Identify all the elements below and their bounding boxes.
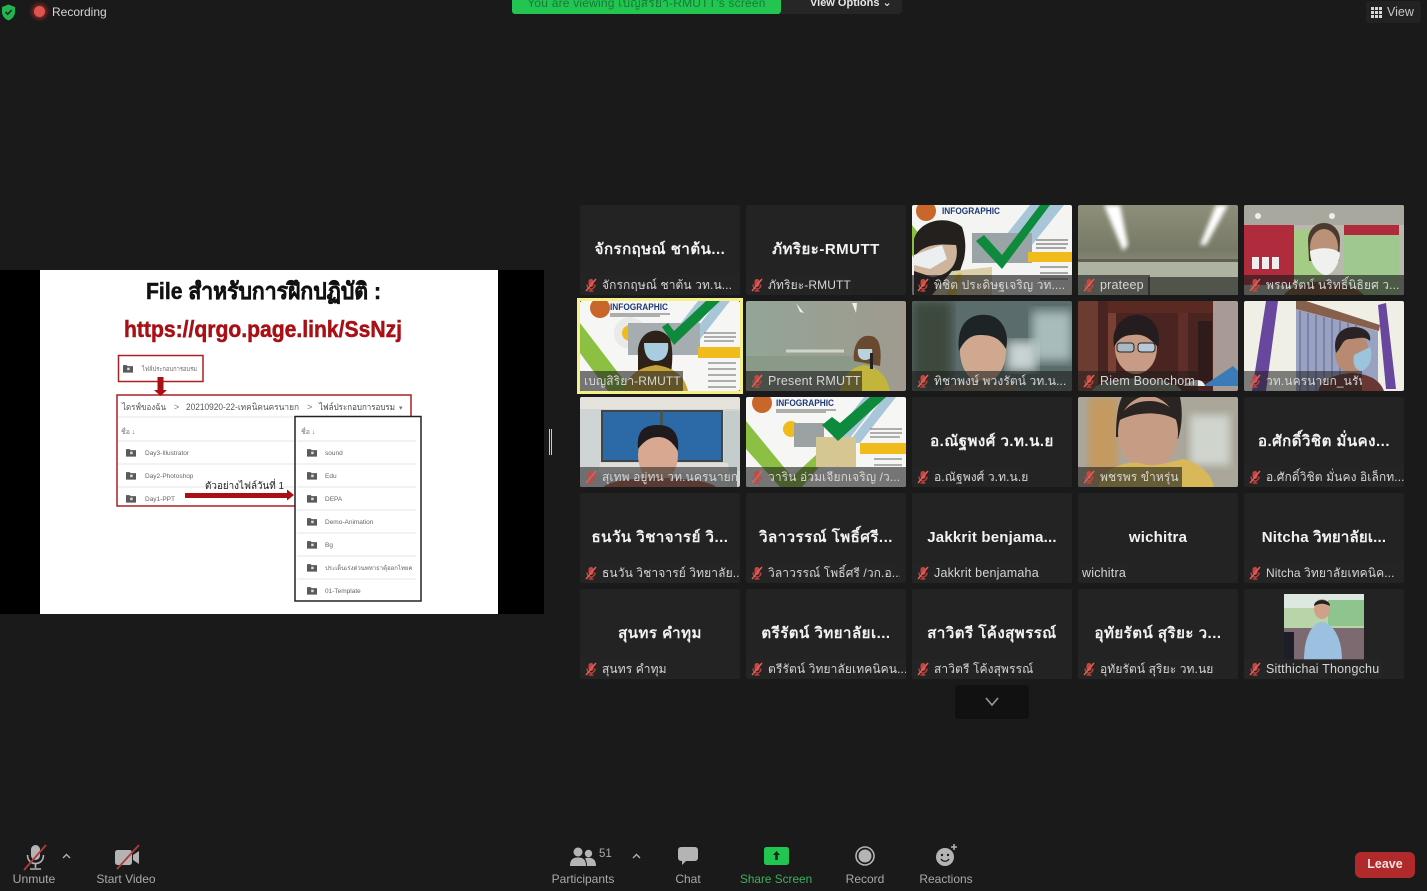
display name: สาวิตรี โค้งสุพรรณ์ [927,625,1057,642]
display name: wichitra [1129,529,1187,546]
day 1 folder list: 01-Template [325,588,361,595]
toolbar: reactions: Reactions [919,872,973,886]
name label [912,371,1072,391]
name label: จักรกฤษณ์ ชาต้น วท.น... [602,278,732,292]
panel: shared slide [0,270,544,614]
name label [746,659,906,679]
name label: พรณรัตน์ นริทธิ์นิธิยศ ว... [1266,278,1399,292]
name label [580,563,740,583]
banner: viewing screen [512,0,781,14]
display name: จักรกฤษณ์ ชาต้น... [595,241,725,258]
tile: participant 13 [912,397,1072,487]
tile: participant 5 video [1244,205,1404,295]
tile: active speaker video [580,301,740,391]
name label [580,371,683,391]
tile: participant 24 [1078,589,1238,679]
tile: participant 10 video [1244,301,1404,391]
display name: วิลาวรรณ์ โพธิ์ศรี... [759,529,893,546]
toolbar: start video: Start Video [96,872,156,886]
video: poster with woman in mask [580,301,740,391]
name label: เบญสิริยา-RMUTT [584,374,681,388]
name label [1078,467,1182,487]
tile: participant 23 [912,589,1072,679]
name label: ทิชาพงษ์ พวงรัตน์ วท.น... [934,374,1066,388]
breadcrumb and file list box: ไดรฟ์ของฉัน [121,401,166,412]
day 1 folder list [295,416,421,601]
tile: participant 2 [746,205,906,295]
video: man by blue window [580,397,740,487]
day 1 folder list: Demo-Animation [325,519,374,526]
tile: participant 19 [1078,493,1238,583]
name label: Nitcha วิทยาลัยเทคนิค... [1266,566,1395,580]
video: woman with microphone [746,301,906,391]
tile: participant 1 [580,205,740,295]
video: poster with man in mask [912,205,1072,295]
toolbar: start video [96,844,156,886]
video: man with curtains [1244,301,1404,391]
breadcrumb and file list box: > [307,402,312,412]
toolbar: unmute [13,844,55,886]
button: leave [1355,852,1415,878]
name label [580,659,667,679]
breadcrumb and file list box: ไฟล์ประกอบการอบรม [318,401,395,412]
panel splitter [549,429,552,455]
tile: participant 16 [580,493,740,583]
name label: พชรพร ขำหรุ่น [1100,470,1179,484]
name label: พิชิต ประดิษฐเจริญ วท.... [934,278,1065,292]
toolbar: record: Record [846,872,884,886]
breadcrumb and file list box: Day3-Illustrator [145,450,190,457]
video: woman with white mask [1244,205,1404,295]
name label: สุนทร คำทุม [602,662,667,676]
arrow: right [185,490,294,500]
tile: Riem Boonchom video [1078,301,1238,391]
video: ceiling with lights [1078,205,1238,295]
tile: participant 12 video [746,397,906,487]
day 1 folder list: ชื่อ ↓ [301,427,315,436]
tile: participant 3 video [912,205,1072,295]
day 1 folder list: Bg [325,542,333,549]
toolbar: participants: 51 [599,848,612,860]
tile: participant 22 [746,589,906,679]
name label [746,467,906,487]
tile: participant 17 [746,493,906,583]
recording indicator: Recording [52,5,107,19]
name label: ภัทริยะ-RMUTT [768,278,851,292]
name label: สุเทพ อยู่ทน วท.นครนายก [602,470,737,484]
arrow: down [154,377,167,396]
name label [912,275,1072,295]
toolbar: chat [675,847,701,886]
toolbar: participants: Participants [552,872,614,886]
name label: Sitthichai Thongchu [1266,662,1379,676]
folder highlight box: ไฟล์ประกอบการอบรม [141,365,197,373]
toolbar: chat: Chat [675,872,701,886]
day 1 folder list: DEPA [325,496,343,503]
display name: Nitcha วิทยาลัยเ... [1262,529,1386,546]
toolbar: unmute: Unmute [13,872,55,886]
display name: ภัทริยะ-RMUTT [772,241,880,258]
name label [1078,371,1198,391]
name label [912,659,1033,679]
recording indicator [30,2,107,22]
video: poster backdrop [746,397,906,487]
toolbar: participants [552,848,614,886]
day 1 folder list: sound [325,450,343,457]
name label [746,563,900,583]
display name: ธนวัน วิชาจารย์ วิ... [592,529,728,546]
name label [912,467,1028,487]
video: poster with man in mask: INFOGRAPHIC [942,206,1000,216]
display name: Jakkrit benjama... [927,529,1057,546]
display name: สุนทร คำทุม [618,625,702,642]
icon: security shield [2,4,15,20]
video: woman close-up [1078,397,1238,487]
name label: วาริน อ่วมเจียกเจริญ /ว... [768,470,900,484]
name label: Riem Boonchom [1100,374,1195,388]
breadcrumb and file list box: Day2-Photoshop [145,473,194,480]
button: view layout: View [1387,5,1414,19]
display name: ตรีรัตน์ วิทยาลัยเ... [761,625,891,642]
slide heading: File สำหรับการฝึกปฏิบัติ : [146,278,381,304]
breadcrumb and file list box [117,395,411,506]
toolbar: share screen [740,847,812,886]
tile: Present RMUTT video [746,301,906,391]
name label [580,275,740,295]
breadcrumb and file list box: 20210920-22-เทคนิคนครนายก [186,402,299,412]
name label [1078,659,1214,679]
toolbar: audio options caret [62,854,70,858]
tile: participant 20 [1244,493,1404,583]
tile: participant 4 video [1078,205,1238,295]
day 1 example caption: ตัวอย่างไฟล์วันที่ 1 [205,478,284,492]
tile: participant 18 [912,493,1072,583]
name label [912,563,1042,583]
name label: อุทัยรัตน์ สุริยะ วท.นย. [1100,662,1214,676]
button: leave: Leave [1367,857,1403,871]
video: man against blurred room [912,301,1072,391]
name label [1244,563,1404,583]
name label [1244,659,1382,679]
breadcrumb and file list box: > [174,402,179,412]
name label [746,371,862,391]
breadcrumb and file list box: ▾ [399,405,403,412]
display name: อ.ณัฐพงศ์ ว.ท.น.ย [930,433,1054,450]
active speaker highlight [577,298,743,394]
name label: วิลาวรรณ์ โพธิ์ศรี /วก.อ... [768,566,900,580]
toolbar: reactions [919,844,973,886]
tile: participant 8 video [912,301,1072,391]
toolbar: participants options caret [632,854,640,858]
display name: อ.ศักดิ์วิชิต มั่นคง... [1258,433,1390,450]
button: view options [781,0,902,14]
button: next page [955,685,1029,719]
breadcrumb and file list box: Day1-PPT [145,496,175,503]
tile: participant 25 with photo [1244,589,1404,679]
name label: อ.ณัฐพงศ์ ว.ท.น.ย [934,470,1028,484]
toolbar: share screen: Share Screen [740,872,812,886]
tile: participant 21 [580,589,740,679]
toolbar: record [846,846,884,886]
tile: participant 14 video [1078,397,1238,487]
display name: อุทัยรัตน์ สุริยะ ว... [1094,625,1222,642]
slide link: https://qrgo.page.link/SsNzj [124,316,402,342]
name label [1078,275,1150,295]
breadcrumb and file list box: ชื่อ ↓ [121,427,135,436]
tile: participant 15 [1244,397,1404,487]
name label [746,275,852,295]
day 1 folder list: Edu [325,473,337,480]
tile: participant 11 video [580,397,740,487]
video: woman with glasses [1078,301,1238,391]
name label [1244,371,1362,391]
name label: wichitra [1082,566,1126,580]
name label [1078,563,1130,583]
video: poster backdrop: INFOGRAPHIC [776,398,834,408]
name label [580,467,737,487]
folder highlight box [118,356,203,382]
name label: ธนวัน วิชาจารย์ วิทยาลัย... [602,566,740,580]
name label [1244,275,1404,295]
name label [1244,467,1404,487]
profile photo [1284,594,1364,660]
name label: ตรีรัตน์ วิทยาลัยเทคนิคน... [768,662,906,676]
video: poster with woman in mask: INFOGRAPHIC [610,302,668,312]
day 1 folder list: ประเด็นเร่งด่วนพหาธาตุ้ออกไทยค [325,563,412,572]
name label: อ.ศักดิ์วิชิต มั่นคง อิเล็กท... [1266,470,1404,484]
name label: สาวิตรี โค้งสุพรรณ์ [934,662,1033,676]
name label: Jakkrit benjamaha [934,566,1039,580]
name label: prateep [1100,278,1144,292]
button: view layout [1366,1,1421,23]
name label: Present RMUTT [768,374,861,388]
